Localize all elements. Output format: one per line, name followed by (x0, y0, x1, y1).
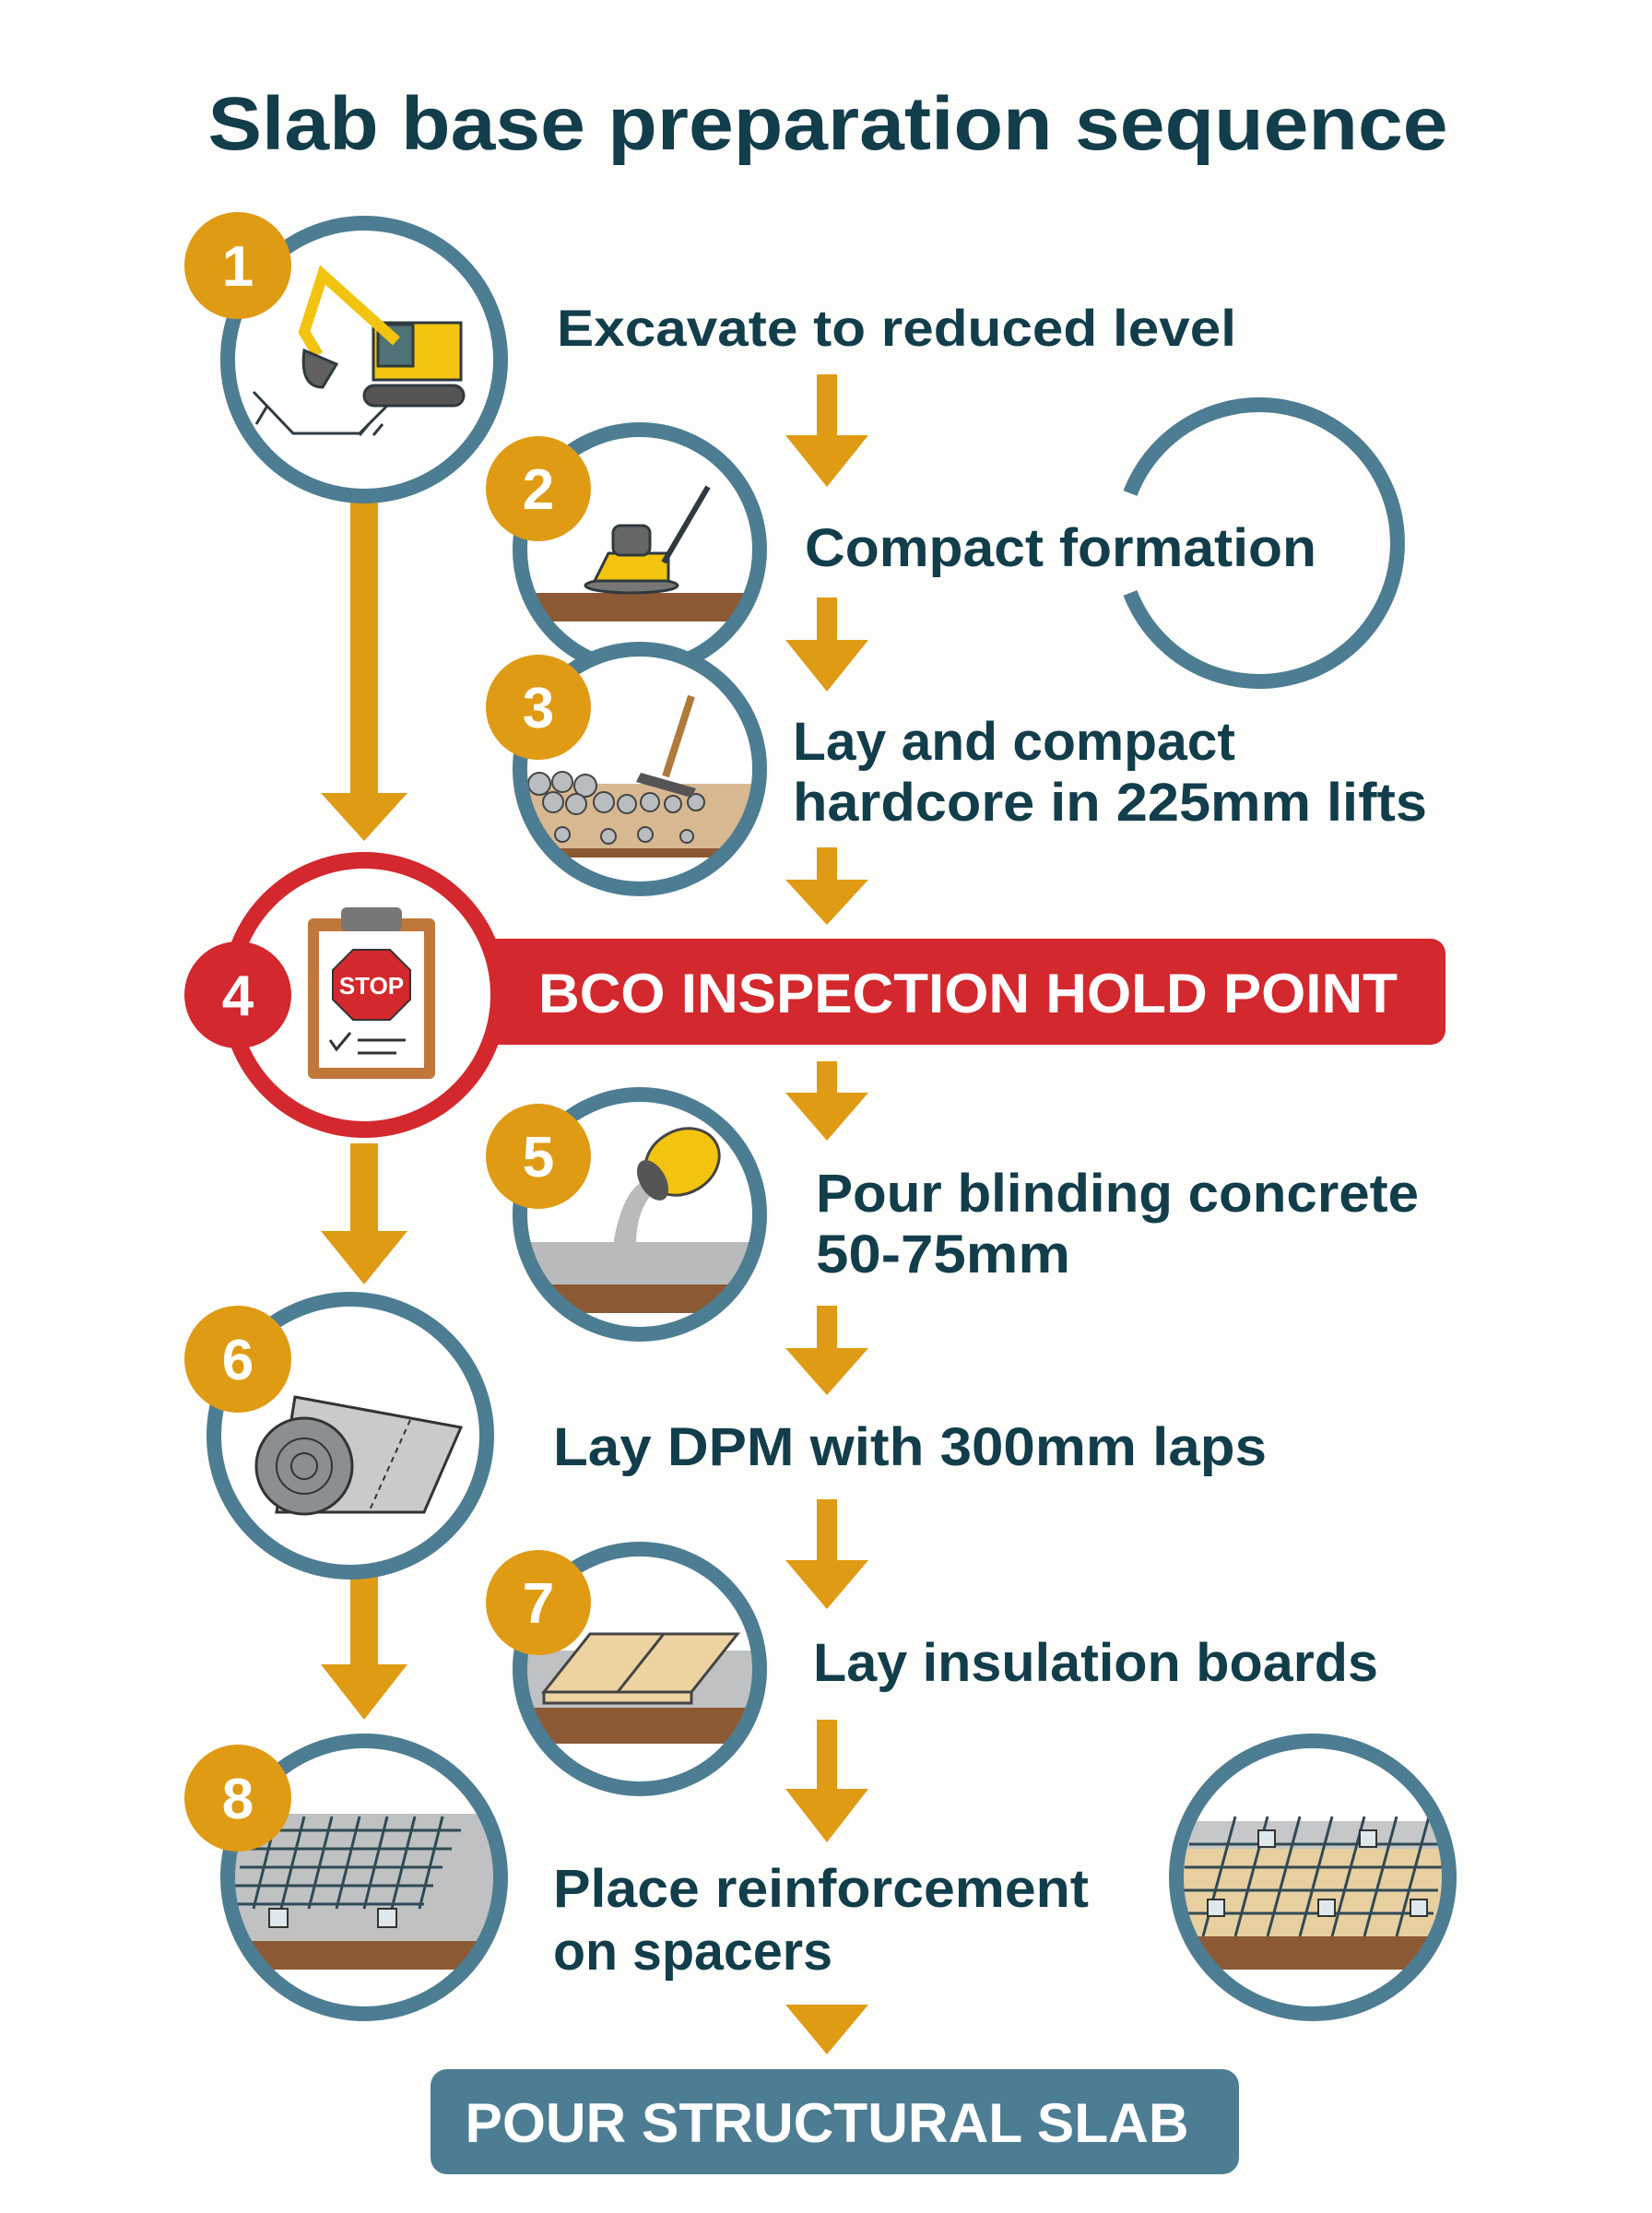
arrow 5 (785, 1306, 868, 1395)
step 6 circle (184, 1299, 487, 1572)
badge 1: 1 (222, 235, 254, 299)
red hold point bar: BCO INSPECTION HOLD POINT (538, 963, 1398, 1024)
badge 6: 6 (222, 1329, 254, 1392)
text step 3: hardcore in 225mm lifts (793, 773, 1427, 833)
badge 8 (184, 1745, 291, 1852)
text step 8: on spacers (553, 1922, 832, 1982)
text step 5: 50-75mm (816, 1225, 1070, 1284)
icon: excavator (254, 275, 464, 435)
text step 8: Place reinforcement (553, 1859, 1089, 1919)
badge 1 (184, 212, 291, 319)
arrow: left 6 to 8 (321, 1577, 407, 1720)
badge 2: 2 (523, 458, 554, 522)
icon: tamper (636, 696, 696, 798)
arrow 3 (785, 847, 868, 925)
icon: DPM roll (256, 1397, 461, 1514)
badge 5 (486, 1104, 591, 1209)
badge 3: 3 (523, 677, 554, 740)
step 8 circle (184, 1741, 516, 2025)
arrow: left 4 to 6 (321, 1143, 407, 1284)
arrow 6 (785, 1499, 868, 1609)
step 4 circle (184, 860, 499, 1130)
text step 5 (816, 1164, 1419, 1284)
open circle decor (1130, 405, 1398, 681)
icon: clipboard stop (308, 907, 435, 1079)
badge 4 (184, 941, 291, 1048)
arrow 7 (785, 1720, 868, 1842)
arrow: left 1 to 4 (321, 501, 407, 841)
text step 1: Excavate to reduced level (557, 299, 1236, 357)
step 2 circle (486, 430, 784, 677)
text step 5: Pour blinding concrete (816, 1164, 1419, 1224)
icon: pouring bucket (613, 1116, 731, 1245)
badge 8: 8 (222, 1768, 254, 1831)
arrow 1 (785, 374, 868, 487)
badge 3 (486, 655, 591, 760)
icon: plate compactor (585, 487, 708, 593)
arrow 4 (785, 1061, 868, 1141)
text step 6: Lay DPM with 300mm laps (553, 1417, 1267, 1477)
icon: mesh (230, 1817, 461, 1909)
icon: insulation boards (544, 1634, 738, 1703)
arrow 2 (785, 598, 868, 692)
step 1 circle (184, 212, 501, 496)
text step 7: Lay insulation boards (813, 1633, 1378, 1693)
text step 8 (553, 1859, 1089, 1982)
step 5 circle (486, 1095, 784, 1350)
final button (431, 2069, 1239, 2174)
text step 3 (793, 712, 1427, 833)
final button: POUR STRUCTURAL SLAB (465, 2092, 1189, 2154)
badge 6 (184, 1306, 291, 1413)
step 3 circle (486, 649, 784, 889)
badge 4: 4 (222, 964, 254, 1028)
title: Slab base preparation sequence (208, 82, 1447, 166)
arrow 8 (785, 2005, 868, 2054)
badge 7 (486, 1550, 591, 1655)
right circle: reinforcement on boards (1171, 1741, 1466, 2025)
badge 7: 7 (523, 1572, 554, 1636)
badge 5: 5 (523, 1126, 554, 1189)
red hold point bar (470, 939, 1446, 1045)
badge 2 (486, 436, 591, 541)
icon: clipboard stop: STOP (339, 972, 404, 1000)
step 7 circle (486, 1549, 784, 1799)
text step 2: Compact formation (805, 518, 1316, 578)
text step 3: Lay and compact (793, 712, 1235, 772)
